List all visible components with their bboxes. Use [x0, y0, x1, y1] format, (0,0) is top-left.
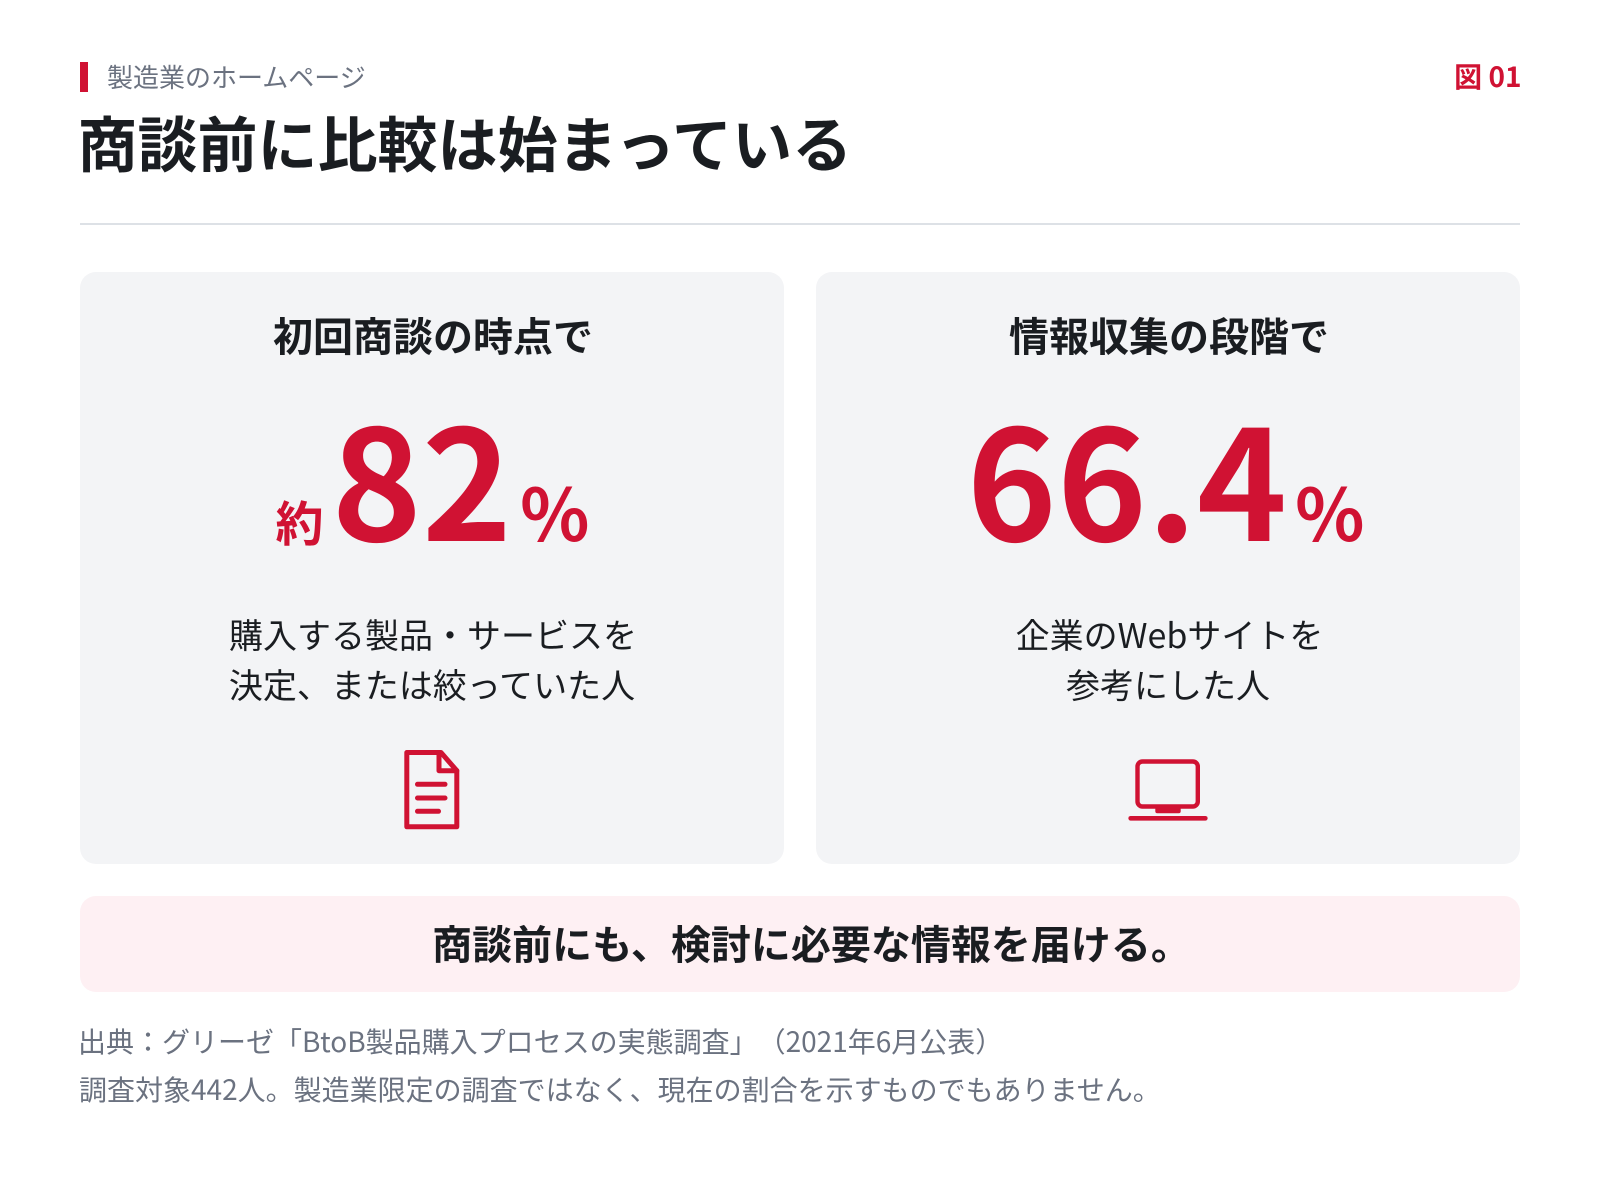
header accent bar	[80, 62, 88, 92]
callout	[80, 896, 1520, 992]
description: 購入する製品・サービスを	[229, 609, 637, 658]
statistic: about 82 percent: 82	[332, 365, 512, 586]
panel: initial meeting	[80, 272, 784, 864]
panel heading: 初回商談の時点で	[273, 305, 593, 363]
description: 企業のWebサイトを	[1016, 609, 1323, 658]
description	[1016, 609, 1323, 708]
callout: 商談前にも、検討に必要な情報を届ける。	[432, 913, 1191, 971]
source note	[78, 1021, 1161, 1109]
icon: document	[404, 750, 460, 830]
description: 参考にした人	[1066, 659, 1270, 708]
statistic: about 82 percent: %	[520, 457, 589, 562]
title: 商談前に比較は始まっている	[78, 98, 852, 185]
icon: laptop	[1128, 759, 1208, 821]
panel: information gathering	[816, 272, 1520, 864]
description	[229, 609, 637, 708]
header divider	[80, 223, 1520, 225]
figure number: 図 01	[1454, 56, 1522, 96]
source note: 出典：グリーゼ「BtoB製品購入プロセスの実態調査」（2021年6月公表）	[78, 1021, 1003, 1061]
statistic: about 82 percent: 約	[276, 485, 324, 555]
panel heading: 情報収集の段階で	[1009, 305, 1329, 363]
statistic: about 82 percent	[276, 365, 589, 586]
eyebrow label: 製造業のホームページ	[107, 58, 366, 95]
statistic: 66.4 percent: %	[1295, 457, 1364, 562]
statistic: 66.4 percent: 66.4	[967, 365, 1287, 586]
description: 決定、または絞っていた人	[229, 659, 635, 708]
source note: 調査対象442人。製造業限定の調査ではなく、現在の割合を示すものでもありません。	[79, 1069, 1161, 1109]
